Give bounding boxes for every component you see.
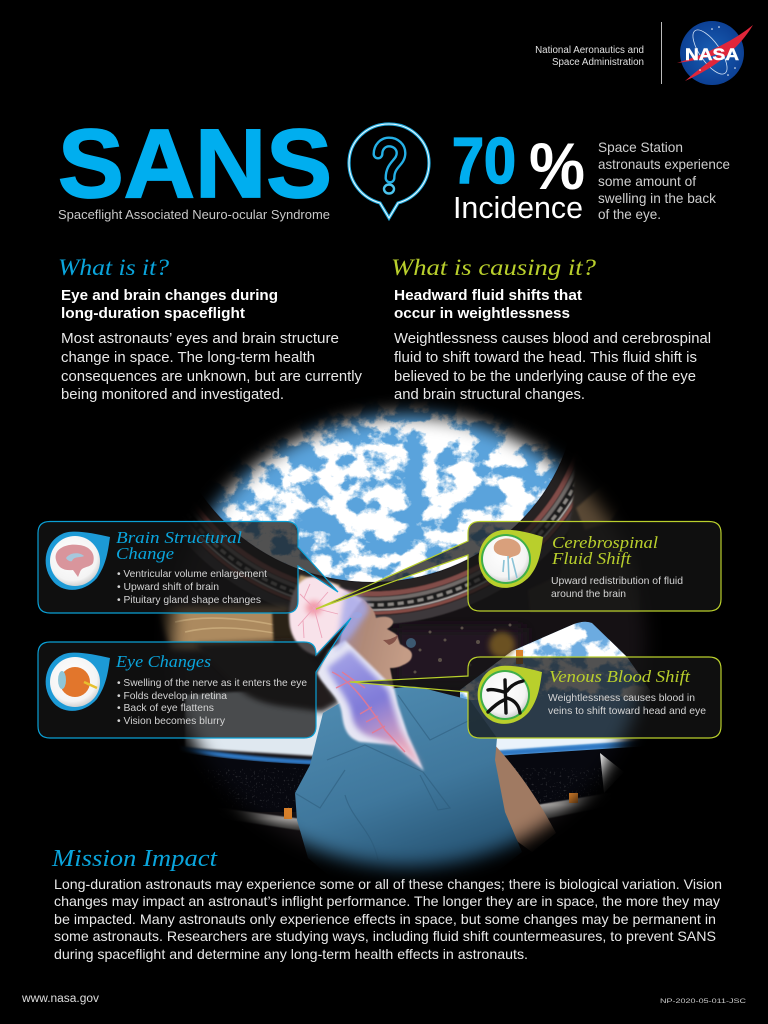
- callout: eye changes: • Back of eye flattens: [117, 703, 214, 714]
- callout: eye changes: • Vision becomes blurry: [117, 716, 226, 727]
- callout: cerebrospinal fluid shift: Upward redistribution of fluid: [551, 576, 683, 587]
- stat description: swelling in the back: [598, 191, 716, 206]
- stat description: of the eye.: [598, 207, 661, 222]
- dark hair: [195, 640, 340, 712]
- callout: brain structural change: Brain Structural: [116, 528, 242, 547]
- callout: cerebrospinal fluid shift: [316, 522, 721, 611]
- callout: brain structural change: [38, 522, 338, 613]
- callout: brain structural change: • Upward shift of brain: [117, 582, 219, 593]
- section: what is causing it: fluid to shift toward the head. This fluid shift is: [394, 350, 697, 366]
- icon: NASA logo: NASA: [685, 45, 739, 64]
- stat: 70% incidence: 70: [452, 124, 516, 197]
- section: what is it: Most astronauts’ eyes and brain structure: [61, 331, 339, 347]
- stat: 70% incidence: %: [529, 129, 585, 203]
- callout: venous blood shift: Venous Blood Shift: [549, 667, 691, 686]
- callout: venous blood shift: veins to shift toward head and eye: [548, 706, 706, 717]
- callout: brain structural change: • Ventricular volume enlargement: [117, 569, 267, 580]
- stat: 70% incidence: Incidence: [453, 191, 583, 225]
- horizon rim: [180, 741, 640, 765]
- stat description: [598, 140, 730, 222]
- section: what is it: [58, 255, 363, 403]
- icon: CSF brain: [479, 530, 543, 588]
- section: what is causing it: believed to be the underlying cause of the eye: [394, 369, 696, 385]
- section: what is it: What is it?: [58, 255, 170, 280]
- white triangle: [600, 753, 620, 792]
- callout: eye changes: • Swelling of the nerve as it enters the eye: [117, 678, 307, 689]
- callout: venous blood shift: [350, 657, 721, 738]
- section: what is causing it: [391, 255, 711, 403]
- section: what is it: consequences are unknown, but are currently: [61, 369, 363, 385]
- icon: NASA logo: [677, 21, 753, 85]
- callout: cerebrospinal fluid shift: Fluid Shift: [551, 549, 632, 568]
- icon: veins: [478, 666, 542, 724]
- icon: eye: [46, 653, 110, 711]
- section: what is it: long-duration spaceflight: [61, 306, 245, 322]
- section: what is causing it: occur in weightlessness: [394, 306, 570, 322]
- horizon glow right: [496, 738, 636, 751]
- callout: brain structural change: Change: [116, 544, 174, 563]
- NASA identity: Space Administration: [552, 57, 644, 68]
- callout: eye changes: • Folds develop in retina: [117, 691, 227, 702]
- section: mission impact: during spaceflight and determine any long-term health effects in astronauts.: [54, 946, 528, 962]
- face: [338, 597, 412, 690]
- NASA identity: National Aeronautics and: [535, 45, 644, 56]
- icon: brain: [46, 532, 110, 590]
- callout: venous blood shift: Weightlessness causes blood in: [548, 693, 695, 704]
- callout: eye changes: [38, 618, 351, 738]
- section: what is it: change in space. The long-term health: [61, 350, 315, 366]
- section: mission impact: Long-duration astronauts may experience some or all of these changes; there is biological variation. Vision: [54, 876, 722, 892]
- shirt collar and placket: [295, 695, 470, 860]
- title: SANS: SANS: [58, 109, 332, 218]
- footer: website: www.nasa.gov: [21, 993, 99, 1005]
- stat description: some amount of: [598, 174, 696, 189]
- stat: 70% incidence: [452, 124, 585, 225]
- NASA identity: [535, 21, 753, 85]
- section: what is causing it: Headward fluid shifts that: [394, 288, 582, 304]
- right lower window: [460, 620, 660, 760]
- footer: document number: NP-2020-05-011-JSC: [660, 999, 747, 1005]
- section: mission impact: be impacted. Many astronauts only experience effects in space, but some changes may be permanent in: [54, 911, 716, 927]
- section: mission impact: changes may impact an astronaut’s inflight performance. The longer they are in space, the more they may: [54, 893, 720, 909]
- interior speckles: [406, 624, 512, 674]
- stat description: Space Station: [598, 140, 683, 155]
- section: mission impact: Mission Impact: [51, 846, 218, 872]
- section: what is causing it: and brain structural changes.: [394, 387, 585, 403]
- space with stars: [198, 747, 634, 812]
- knee of second astronaut: [528, 460, 640, 612]
- icon: question mark speech bubble: [349, 124, 429, 218]
- window frame ring: [193, 462, 575, 624]
- callout: eye changes: Eye Changes: [115, 652, 211, 671]
- interior mauve wall: [397, 630, 523, 678]
- blonde hair: [155, 575, 340, 650]
- arm: [495, 746, 556, 850]
- section: mission impact: some astronauts. Researchers are studying ways, including fluid shift countermeasures, to prevent SANS: [54, 928, 716, 944]
- stat description: astronauts experience: [598, 157, 730, 172]
- callout: cerebrospinal fluid shift: Cerebrospinal: [552, 533, 658, 552]
- orange tags: [284, 650, 578, 819]
- section: what is causing it: Weightlessness causes blood and cerebrospinal: [394, 331, 711, 347]
- brain overlay: [289, 577, 368, 656]
- lens flare: [489, 632, 515, 658]
- section: what is it: being monitored and investigated.: [61, 387, 284, 403]
- callout: cerebrospinal fluid shift: around the brain: [551, 589, 626, 600]
- eye: [356, 612, 362, 618]
- neck overlay: veins: [317, 640, 424, 771]
- callout: brain structural change: • Pituitary gland shape changes: [117, 595, 261, 606]
- top window: earth and clouds: [205, 400, 564, 582]
- photo: astronaut in cupola: [159, 400, 650, 880]
- window bottom frame: [233, 810, 300, 831]
- title: SANS: Spaceflight Associated Neuro-ocular Syndrome: [58, 208, 330, 222]
- section: mission impact: [51, 846, 722, 962]
- shirt: [295, 686, 522, 885]
- cupola interior: [206, 470, 648, 846]
- mouth: [383, 635, 398, 645]
- section: what is it: Eye and brain changes during: [61, 288, 278, 304]
- lower left window sky: [185, 685, 345, 758]
- section: what is causing it: What is causing it?: [391, 255, 597, 280]
